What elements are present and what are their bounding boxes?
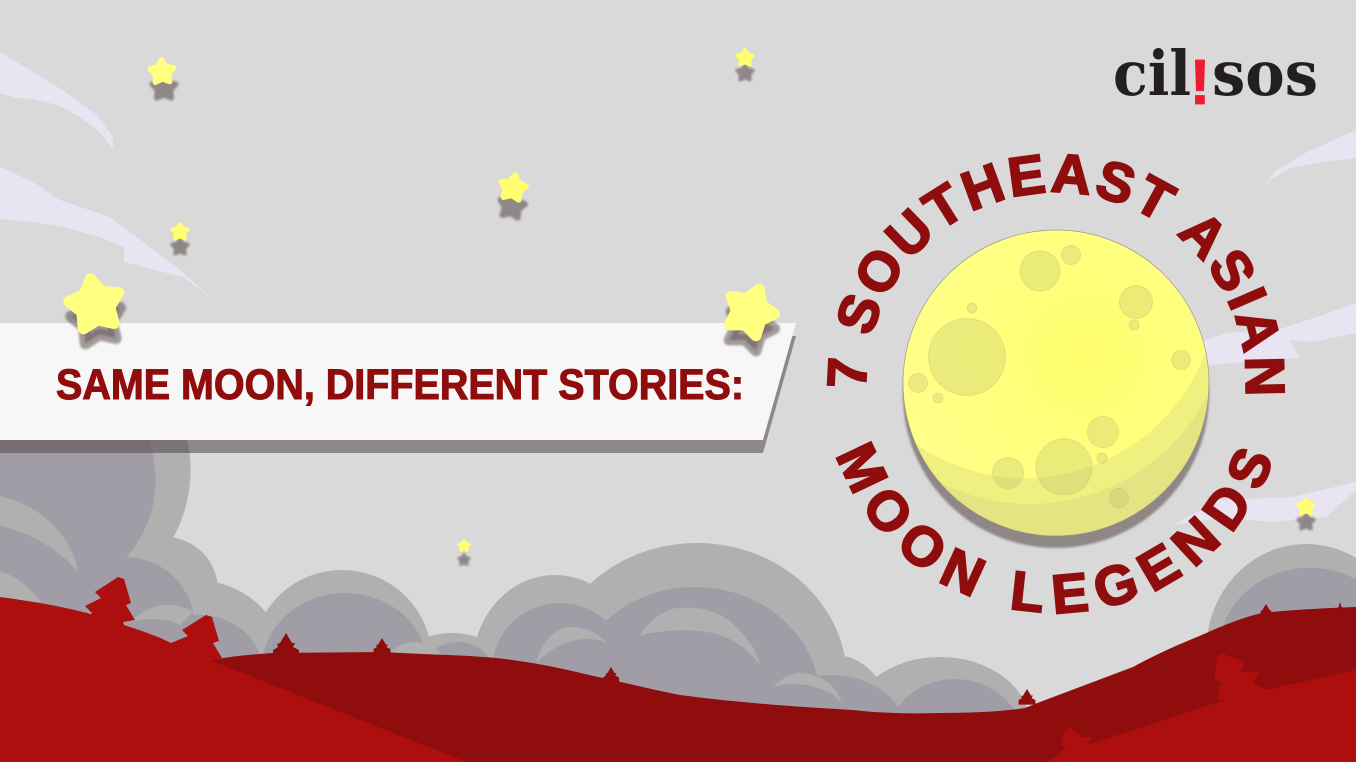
- logo cil: cil: [1113, 37, 1191, 110]
- dark red back hill with trees: [210, 602, 1356, 762]
- moon disc: [903, 230, 1209, 536]
- craters: [908, 246, 1190, 508]
- logo sos: sos: [1212, 37, 1318, 110]
- star 2: [737, 50, 753, 80]
- logo exclamation mark: !: [1189, 46, 1211, 118]
- cloud highlights: [0, 496, 842, 703]
- star 3: [498, 173, 528, 219]
- moon: [902, 230, 1210, 550]
- star on banner left: [66, 275, 125, 345]
- grey cloud bank: [0, 329, 1356, 760]
- title arc top: 7 SOUTHEAST ASIAN: [826, 154, 1286, 394]
- star 4: [172, 224, 188, 254]
- circular title: [826, 154, 1286, 614]
- front cloud layer: [0, 364, 1356, 760]
- banner: [0, 323, 796, 440]
- logo: [1113, 37, 1318, 118]
- stars in the sky: [150, 50, 1314, 565]
- star 6: [1298, 499, 1314, 529]
- moon shadow: [903, 242, 1209, 548]
- star on banner right: [721, 280, 781, 354]
- back cloud layer: [0, 329, 1356, 760]
- title arc bottom: MOON LEGENDS: [835, 440, 1271, 614]
- star 1: [150, 59, 176, 98]
- star 5: [459, 540, 469, 565]
- wispy clouds: [0, 52, 1356, 525]
- bright red foreground hills with trees: [0, 577, 1356, 762]
- banner heading: SAME MOON, DIFFERENT STORIES:: [56, 361, 744, 409]
- banner shadow: [0, 336, 796, 453]
